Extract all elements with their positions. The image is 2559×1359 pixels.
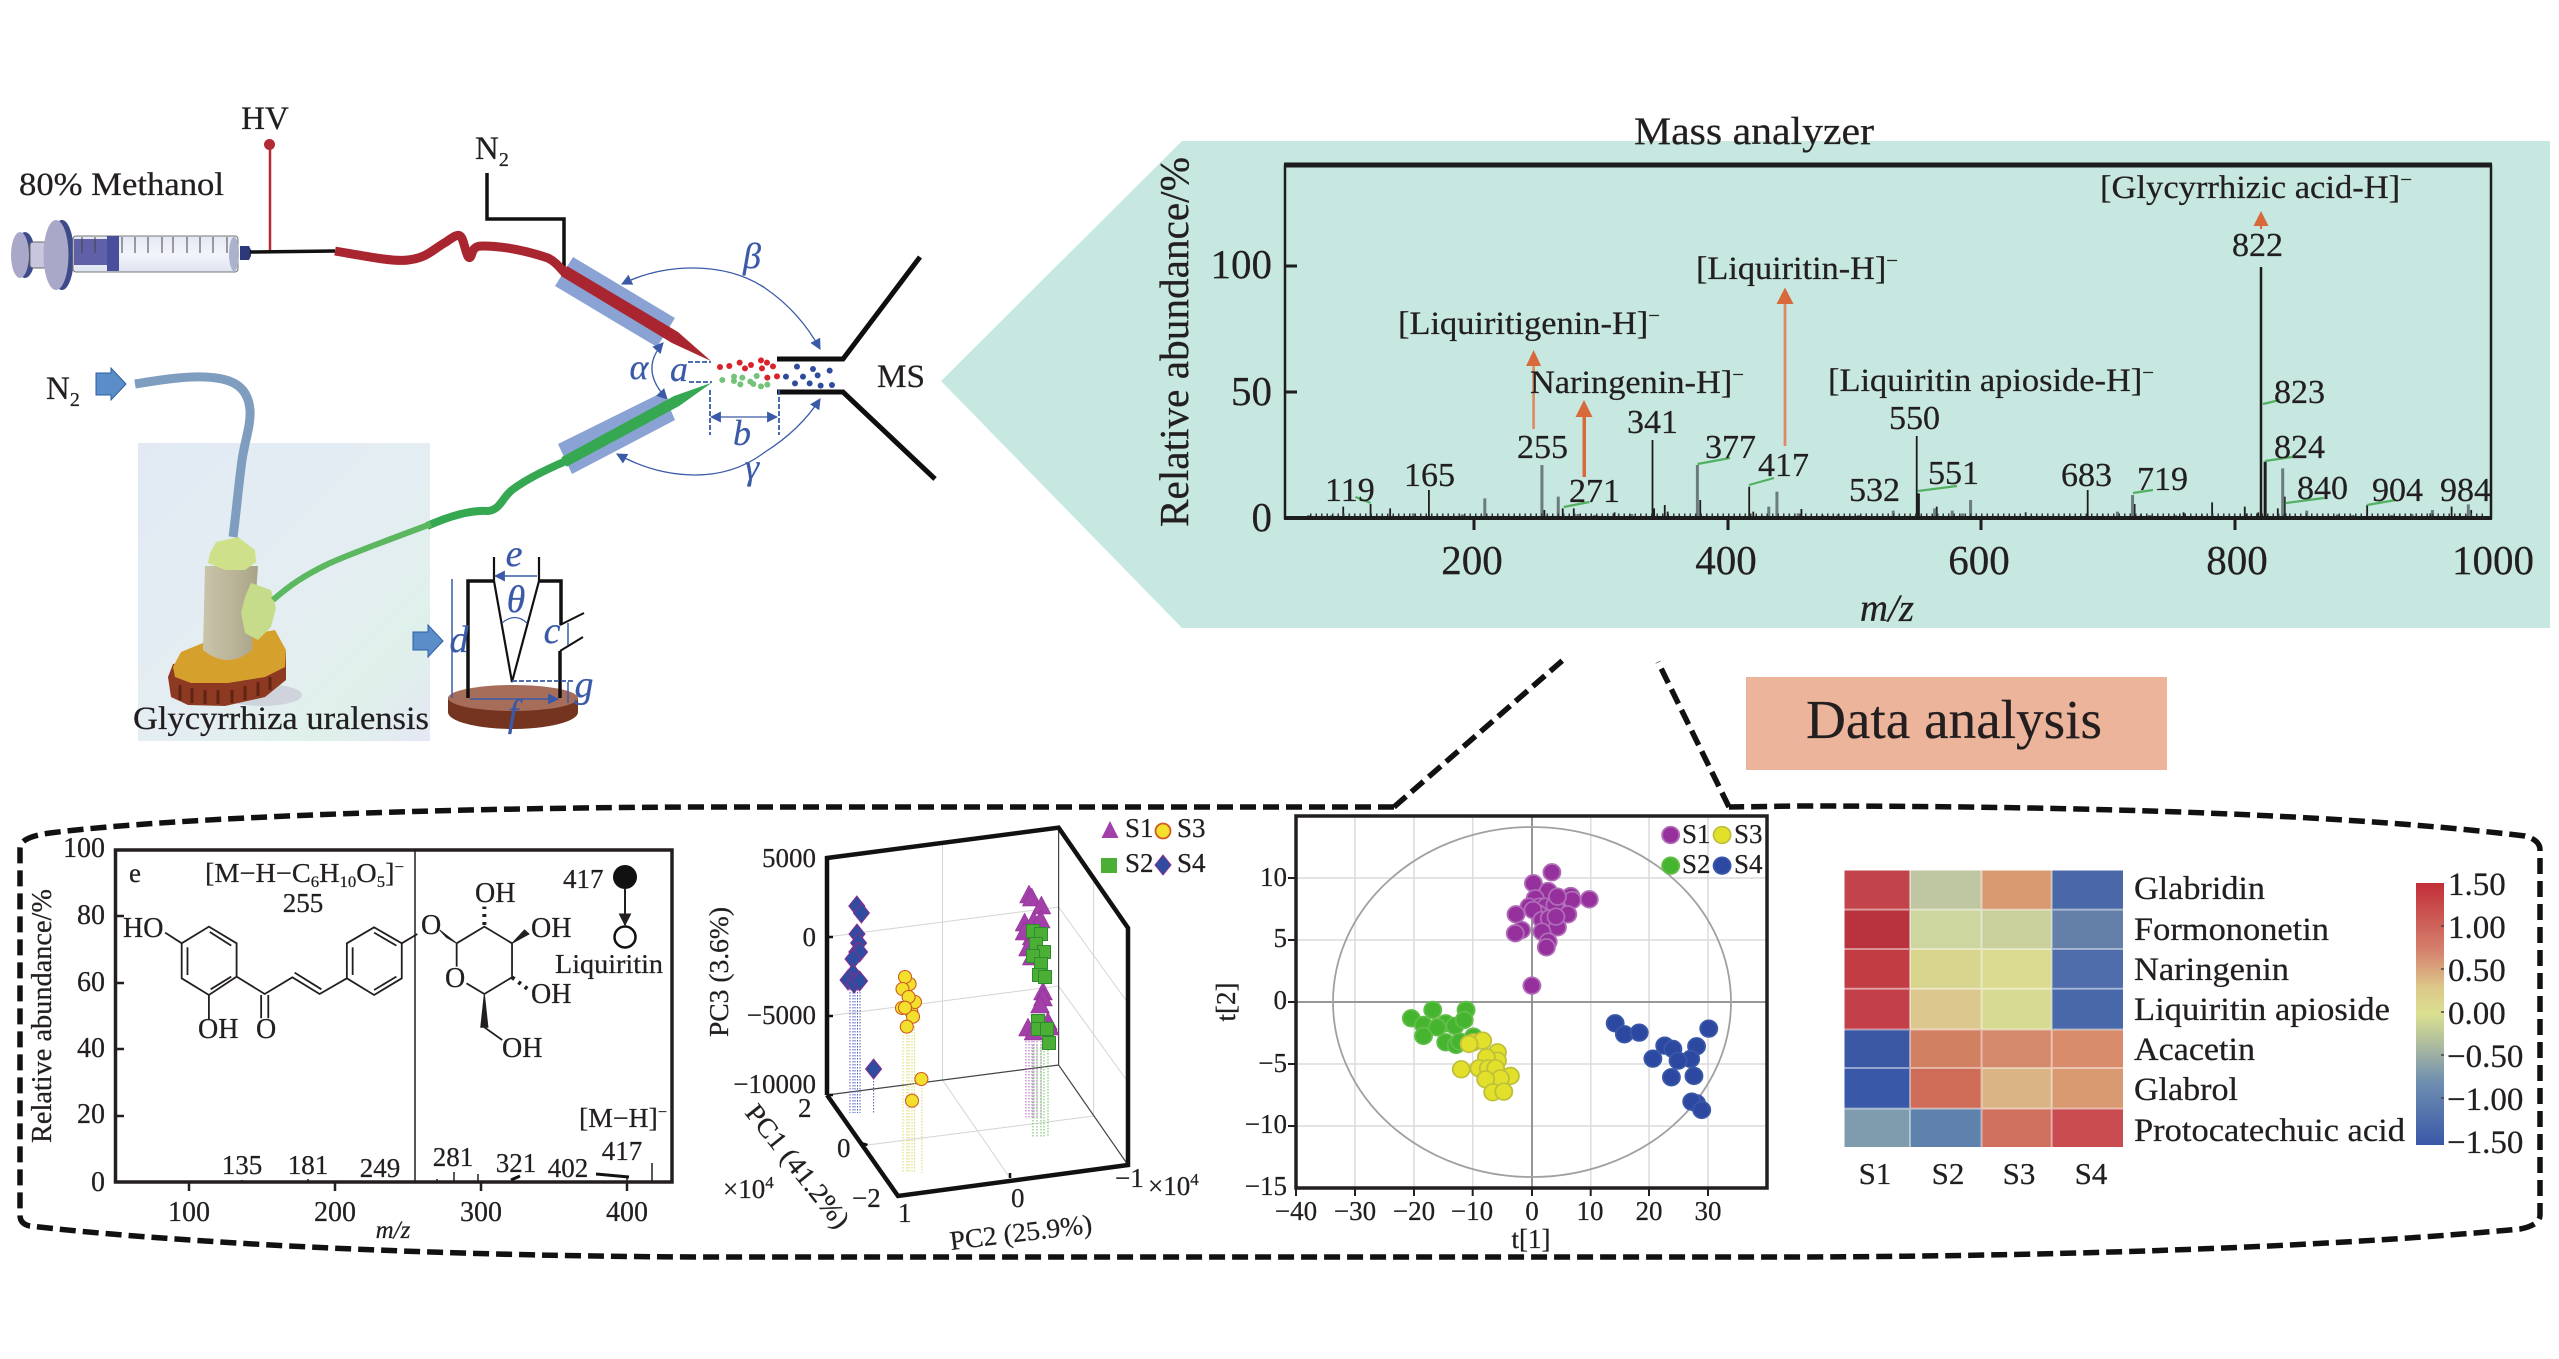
herb slice side [168,652,286,706]
other numbers: 0 [837,1133,850,1163]
compound labels: Naringenin [2134,952,2289,988]
transition arrow [624,889,626,925]
peak m/z labels: 550 [1889,400,1940,437]
y numbers: 60 [77,967,105,998]
other numbers: 0 [1011,1183,1024,1213]
compound labels: [Liquiritigenin-H] [1398,306,1638,342]
greek labels: β [742,236,761,276]
colour bar labels: 1.00 [2448,910,2506,946]
chamber walls [468,581,561,698]
y numbers: 10 [1260,862,1287,892]
label: N2 left: N [46,371,70,407]
structure atoms: OH [475,878,515,909]
legend labels: S1 [1682,819,1711,849]
peak m/z labels: 683 [2061,457,2112,494]
compound labels: [Liquiritin-H] [1696,251,1879,287]
frame top edge [1284,162,2492,168]
hollow product [614,926,636,948]
structure atoms [123,878,571,1064]
peak m/z labels: 119 [1325,472,1375,509]
x axis title: m/z [1860,587,1914,630]
x numbers [1275,1196,1722,1226]
colour bar labels: 0.50 [2448,953,2506,989]
rear flange edge [15,232,35,278]
capillary: black needle segment [250,251,335,252]
peak m/z labels: 417 [1758,447,1809,484]
dashed callout [20,660,2540,1257]
compound labels: − [2142,362,2154,384]
heading: Mass analyzer: Mass analyzer [1634,110,1874,153]
sample labels: S2 [1932,1156,1964,1191]
precursor ion icon [613,865,637,948]
herb slice shadow [222,684,302,706]
frame [116,850,672,1182]
axis ticks [1285,266,2235,530]
legend: S4 [1177,848,1206,878]
barrel [73,236,238,272]
disk top [448,685,578,711]
peak m/z labels: 823 [2274,374,2325,411]
diagram: sampling chamber [413,533,594,735]
annotations: [M−H] [579,1103,656,1133]
chart: score plot [1211,816,1767,1254]
y title: t[2] [1211,983,1241,1021]
x numbers: 10 [1576,1196,1604,1226]
fragment labels: 402 [548,1153,588,1183]
PC3 numbers [733,843,816,1099]
other numbers: 4 [1190,1170,1199,1189]
dimension letters: θ [507,579,525,621]
label: N2 top: 2 [499,149,509,171]
spectrum peaks [1309,436,2471,518]
x numbers: 400 [606,1197,648,1228]
MS inlet [777,257,935,479]
panel: mass analyzer teal background [941,141,2550,628]
peaks [242,1163,652,1182]
label: N2 left: 2 [70,389,80,411]
panel: Data analysis [1746,677,2167,770]
g dashed line [512,680,573,682]
annotations: 10 [340,874,356,891]
S4 diamonds [840,896,882,1079]
compound labels: [Glycyrrhizic acid-H] [2100,170,2387,206]
label: 80% Methanol: 80% Methanol [19,167,224,203]
compound labels: [Liquiritin apioside-H] [1828,363,2130,399]
other numbers: ×10 [1148,1171,1190,1201]
peak m/z labels: 904 [2372,472,2423,509]
orange annotation arrows [1526,211,2268,477]
cells [1844,870,2123,1147]
PC3 numbers: −5000 [747,1000,816,1030]
greek labels: b [733,413,751,453]
ticks [1288,878,1708,1196]
piston [107,236,119,271]
y numbers: 5 [1274,923,1287,953]
photo: Glycyrrhiza uralensis sample [133,443,430,741]
colour bar ticks [2441,926,2444,1098]
compound labels: Acacetin [2134,1032,2255,1068]
other numbers: −1 [1115,1163,1144,1193]
filled precursor [613,865,637,889]
y numbers: 100 [63,833,105,864]
chart: heatmap [1844,867,2523,1191]
peak m/z labels: 822 [2232,227,2283,264]
colour bar labels [2447,867,2523,1161]
compound labels: − [2400,169,2412,191]
fragment labels: 181 [288,1150,328,1180]
theta arc [502,618,527,623]
structure atoms: O [445,963,465,994]
high voltage electrode dot [264,139,275,150]
annotations: 5 [377,874,385,891]
compound labels [2134,871,2406,1149]
peak m/z labels: 719 [2137,461,2188,498]
dimension letters: e [506,533,523,575]
dimension letters: f [508,693,523,735]
x axis numbers [1441,537,2534,583]
label: Data analysis [1806,689,2102,750]
label: HV: HV [241,101,289,137]
plunger rod [30,242,57,268]
greek labels: α [630,347,650,387]
x numbers: −30 [1334,1196,1376,1226]
compound labels: Naringenin-H] [1530,365,1724,401]
peak m/z labels: 532 [1849,472,1900,509]
annotations: ] [385,858,395,888]
dimension letters: c [544,610,561,652]
greek labels: γ [745,447,760,487]
annotations [129,858,667,1133]
inner axes [827,828,1128,1165]
y numbers [1245,862,1287,1201]
sample labels: S3 [2003,1156,2035,1191]
y numbers: 40 [77,1033,105,1064]
y numbers: −10 [1245,1109,1287,1139]
other numbers: 1 [898,1198,912,1228]
x numbers: 30 [1694,1196,1722,1226]
dimension letters: g [574,664,594,706]
legend: S1 [1125,813,1154,843]
dimension letters: d [450,619,470,661]
colour bar labels: 0.00 [2448,996,2506,1032]
box [1746,677,2167,770]
fragment labels: 281 [433,1142,473,1172]
compound labels: Glabridin [2134,871,2265,907]
compound labels: Liquiritin apioside [2134,992,2390,1028]
colour bar labels: 1.50 [2448,867,2506,903]
y axis numbers: 100 [1210,241,1272,287]
annotations: Liquiritin [555,949,664,979]
sample labels [1859,1156,2108,1191]
beta arc [622,268,820,349]
legend dots [1662,827,1731,874]
greek labels [630,236,761,487]
tube: green sampling line [427,461,566,526]
confidence ellipse [1333,827,1731,1177]
peak m/z labels [1325,227,2491,510]
b dashes [710,390,779,435]
PC3 numbers: 0 [802,922,816,952]
x numbers: 0 [1525,1196,1539,1226]
colour bar labels: −0.50 [2447,1039,2523,1075]
outline [20,806,2540,1257]
legend labels: S4 [1734,849,1763,879]
x title: t[1] [1512,1224,1550,1254]
frame [1296,816,1767,1188]
S4 points [1607,1015,1717,1118]
sample labels: S1 [1859,1156,1891,1191]
S4 marker [1155,855,1171,875]
peak m/z labels: 824 [2274,429,2325,466]
S1 triangles [1015,885,1059,1040]
other numbers [723,1093,1199,1228]
blue droplets [783,364,835,389]
S2 squares [1026,924,1056,1050]
structure atoms: OH [502,1033,542,1064]
y axis numbers [1210,241,1272,540]
y axis numbers: 50 [1231,368,1272,414]
graduations [82,237,227,253]
legend [1101,813,1206,878]
legend: S2 [1125,848,1154,878]
PC3 title: PC3 (3.6%) [704,907,734,1037]
peak m/z labels: 341 [1627,404,1678,441]
greek labels: a [670,349,688,389]
colour bar labels: −1.00 [2447,1082,2523,1118]
grid [827,845,1128,1178]
S3 circles [896,970,928,1107]
annotations: 6 [311,874,319,891]
gridlines [1296,816,1767,1188]
syringe [11,220,251,290]
x axis numbers: 600 [1948,537,2010,583]
green droplets [719,373,770,389]
PC1 title: PC1 (41.2%) [739,1098,856,1234]
base peak 822 [2260,267,2262,518]
other numbers: ×10 [723,1174,765,1204]
arrow: N2 inflow [96,368,126,400]
x numbers: 200 [314,1197,356,1228]
ion droplets [717,357,835,389]
annotations: 255 [283,888,323,918]
ticks [115,916,627,1191]
legend: S3 [1177,813,1206,843]
herb slice top face [173,630,286,683]
disk side [448,698,578,729]
y axis numbers: 0 [1252,494,1272,540]
barrel end [229,237,239,271]
tube: green inside photo [273,524,431,600]
y numbers [63,833,105,1198]
front flange [44,220,68,290]
y axis title: Relative abundance/% [1151,157,1197,527]
plot frame [1285,166,2491,519]
peak m/z labels: 377 [1705,429,1756,466]
x numbers: −40 [1275,1196,1317,1226]
legend labels: S3 [1734,819,1763,849]
gamma arc [617,399,820,475]
structure atoms: HO [123,913,163,944]
fragment labels [222,1136,642,1183]
S1 marker [1102,821,1118,838]
baseline noise [1310,514,2485,518]
annotations: [M−H−C [205,858,306,888]
dimension arrows [452,576,568,703]
y numbers: −5 [1258,1048,1287,1078]
needle: red [561,266,711,361]
gas line: N2 top [487,173,564,268]
legend labels: S2 [1682,849,1711,879]
sample label: Glycyrrhiza uralensis [133,701,429,737]
peak m/z labels: 271 [1569,473,1620,510]
peak m/z labels: 165 [1404,457,1455,494]
structure atoms: OH [531,913,571,944]
PC3 numbers: −10000 [733,1069,816,1099]
photo background [138,443,430,741]
S1 points [1507,864,1598,994]
structure atoms: O [256,1014,276,1045]
frame bottom edge and ticks [1284,516,2492,520]
fragment labels: 417 [602,1136,642,1166]
x numbers: −10 [1451,1196,1493,1226]
gel cap [208,537,256,570]
PC2 title: PC2 (25.9%) [948,1209,1094,1256]
x axis numbers: 400 [1695,537,1757,583]
side port [560,613,584,651]
x axis numbers: 1000 [2452,537,2534,583]
inner tube and cone [494,557,539,682]
peak m/z labels: 255 [1517,429,1568,466]
fragment labels: 249 [360,1153,400,1183]
x numbers [168,1197,648,1228]
label: N2 top: N [475,131,499,167]
leader marks [511,1174,629,1180]
front flange edge [50,220,74,290]
S3 points [1453,1032,1519,1101]
high voltage lead [269,146,271,251]
molecular structure [165,907,529,1040]
rear flange [11,232,29,278]
fragment labels: 135 [222,1150,262,1180]
PC3 numbers: 5000 [762,843,816,873]
chart: MS/MS spectrum of liquiritin [27,833,672,1244]
structure atoms: OH [198,1014,238,1045]
compound labels: − [1732,364,1744,386]
nozzle [240,246,251,260]
compound labels: Formononetin [2134,912,2329,948]
peak m/z labels: 551 [1928,455,1979,492]
sample labels: S4 [2075,1156,2108,1191]
label: MS: MS [877,359,925,395]
chart: mass spectrum [1151,157,2534,630]
arrow: gas inlet [413,625,443,657]
other numbers: 2 [798,1093,812,1123]
annotations: e [129,858,141,888]
annotations: H [319,858,340,888]
annotations: 417 [563,864,604,894]
alpha arc [652,343,667,399]
compound labels: Protocatechuic acid [2134,1113,2406,1149]
compound labels: − [1886,250,1898,272]
x numbers: 20 [1636,1196,1662,1226]
x numbers: 100 [168,1197,210,1228]
y numbers: 0 [91,1167,105,1198]
peak m/z labels: 840 [2297,470,2348,507]
cylinder [203,566,258,660]
S2 marker [1101,858,1117,873]
y title: Relative abundance/% [27,889,58,1143]
3D box frame [827,828,1128,1196]
y numbers: 80 [77,900,105,931]
geometry annotations [617,236,820,487]
structure atoms: O [421,910,441,941]
dimension letters [450,533,594,735]
tube: blue nitrogen line [135,377,250,537]
compound labels: Glabrol [2134,1072,2238,1108]
annotations: O [356,858,377,888]
b arrow [711,416,777,418]
drop lines [850,980,1048,1173]
left diagonal [1394,660,1563,807]
scatter points [1403,827,1731,1118]
y numbers: −15 [1245,1171,1287,1201]
cleavage divider [414,850,416,1182]
a dashes [688,362,712,382]
red droplets [717,357,780,381]
annotations: − [658,1104,667,1121]
other numbers: 4 [765,1173,774,1192]
colour bar labels: −1.50 [2447,1125,2523,1161]
needle: green [561,383,712,467]
legend labels [1682,819,1763,879]
x numbers: 300 [460,1197,502,1228]
x axis numbers: 800 [2206,537,2268,583]
right diagonal [1658,662,1729,807]
fragment labels: 321 [496,1148,536,1178]
y numbers: 20 [77,1099,105,1130]
sprayer sheath: lower [558,392,675,474]
S2 points [1403,1002,1482,1053]
axes through origin [1296,816,1767,1188]
x axis numbers: 200 [1441,537,1503,583]
x numbers: −20 [1393,1196,1435,1226]
other numbers: −2 [852,1183,881,1213]
compound labels [1398,169,2412,401]
colour bar [2416,883,2444,1145]
liquid [74,239,110,265]
cell gridlines [1844,870,2123,1147]
leader lines [1356,400,2396,507]
y numbers: 0 [1274,985,1287,1015]
ticks [827,937,1010,1178]
compound labels: − [1648,305,1660,327]
peak m/z labels: 984 [2440,472,2491,509]
annotations: − [395,859,404,876]
yellow patch [241,583,276,640]
herb slice texture [180,677,270,704]
sprayer sheath: upper [555,257,675,347]
x title: m/z [376,1217,411,1244]
tube: red solvent line [335,235,566,274]
S3 marker [1156,824,1170,838]
structure atoms: OH [531,979,571,1010]
chart: 3D PCA [704,813,1206,1256]
